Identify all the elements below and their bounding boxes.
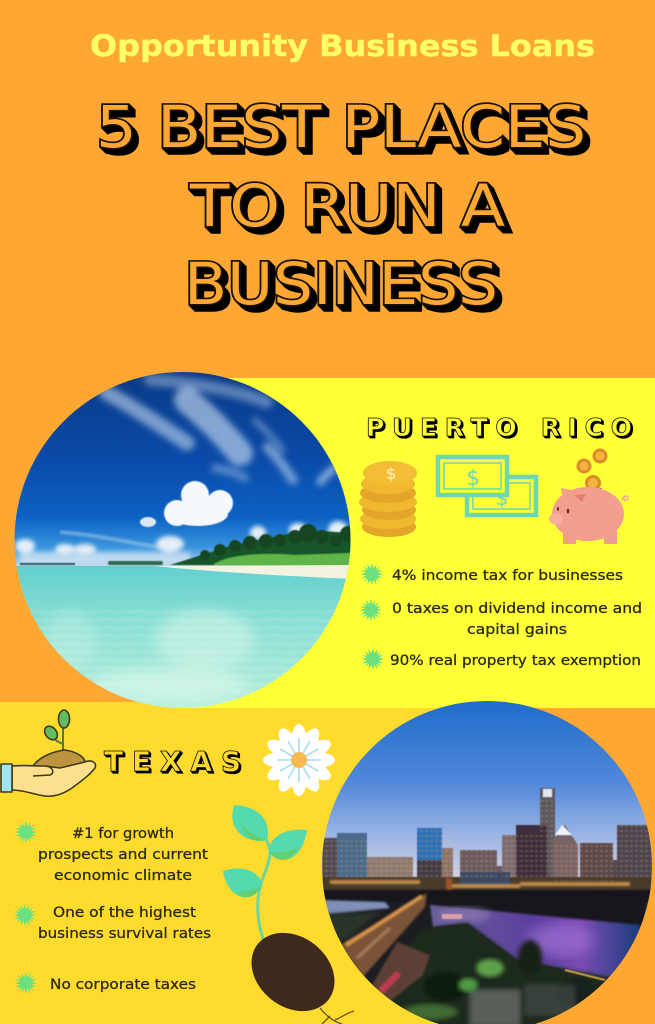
fact text <box>392 601 642 638</box>
icon: banknotes: $ <box>466 466 480 490</box>
bridge and road <box>340 893 430 1005</box>
fact text: 4% income tax for businesses <box>392 568 623 584</box>
bullet star <box>14 904 36 926</box>
bullet star <box>360 599 382 621</box>
icon: banknotes: $ <box>496 486 508 510</box>
fact text: prospects and current <box>38 847 208 863</box>
icon: hand holding sprout <box>1 710 95 796</box>
icon: coin stack <box>359 461 417 537</box>
fact text: 90% real property tax exemption <box>390 653 641 669</box>
icon: coin stack: $ <box>385 464 397 483</box>
horizon clouds <box>15 521 348 564</box>
tree line <box>320 890 655 901</box>
photo: tropical beach <box>10 370 356 711</box>
fact text: economic climate <box>54 868 192 884</box>
illustration: sprouting seed <box>223 805 354 1024</box>
water <box>10 566 355 711</box>
icon: banknotes <box>438 457 536 515</box>
list: Texas facts <box>14 821 211 994</box>
photo: Austin skyline <box>320 700 655 1024</box>
river <box>430 905 640 978</box>
fact text: #1 for growth <box>72 826 174 842</box>
city lights <box>330 878 630 892</box>
fact text: business survival rates <box>38 926 211 942</box>
wispy clouds <box>107 380 334 482</box>
fact text: 0 taxes on dividend income and <box>392 601 642 617</box>
title <box>96 93 586 318</box>
list: Puerto Rico facts <box>360 563 642 670</box>
sand <box>155 565 352 579</box>
bullet star <box>362 648 384 670</box>
icon: daisy flower <box>263 724 335 796</box>
fact text: One of the highest <box>53 905 196 921</box>
fact text: No corporate taxes <box>50 977 196 993</box>
title: 5 BEST PLACES <box>96 93 586 161</box>
fact text <box>38 826 208 884</box>
title: BUSINESS <box>184 250 498 318</box>
fact text <box>38 905 211 942</box>
heading: Texas: TEXAS <box>104 745 241 778</box>
bullet star <box>15 821 37 843</box>
palm island <box>20 524 356 566</box>
bullet star <box>15 972 37 994</box>
fact text: capital gains <box>467 622 567 638</box>
cloud <box>140 481 233 527</box>
icon: piggy bank <box>549 448 628 544</box>
park trees <box>320 912 610 1024</box>
bullet star <box>361 563 383 585</box>
heading: Puerto Rico: PUERTO RICO <box>366 413 632 442</box>
buildings <box>320 788 655 891</box>
title: TO RUN A <box>189 172 505 240</box>
brand heading: Opportunity Business Loans <box>90 29 595 63</box>
